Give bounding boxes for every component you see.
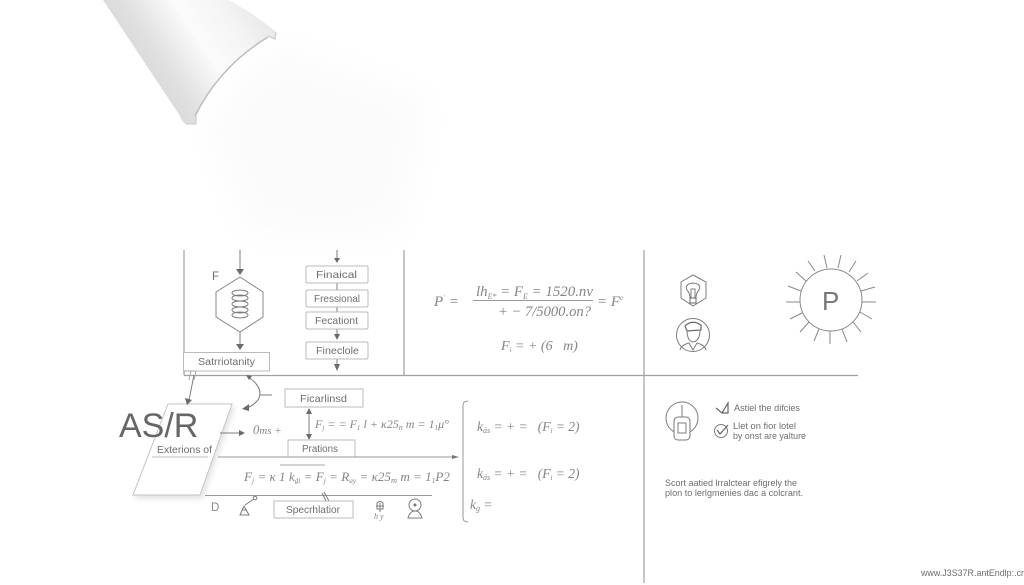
icon: circled check [714,424,728,438]
icon: small figure with label [374,502,384,521]
icon: hexagon with coil [216,277,263,332]
icon: check mark [716,403,728,413]
formula: lower: = κ 1 k [254,470,295,484]
equation 3: k [470,497,476,512]
formula: numerator: E [522,292,528,301]
formula: second line: F [501,339,510,354]
icon: light bulb hexagon [681,275,706,306]
icon: sun with letter P: P [822,286,839,316]
panel: stacked label boxes [306,250,368,371]
arrow: double headed [306,408,312,440]
formula: lower: 1 [432,477,435,485]
equation 3: g [476,504,480,513]
formula: numerator: = F [496,284,524,300]
box: Fecationt: Fecationt [315,315,358,327]
formula: left side: P [434,294,443,310]
note line 1: Scort aatied lrralctear efigrely the [665,478,797,488]
bracket [463,401,468,522]
rule below formula [205,494,432,496]
box: Ficarlinsd [285,389,363,407]
light beam [205,45,430,235]
formula: upper: 1 [435,424,438,432]
box: Satrriotanity: Satrriotanity [198,357,255,368]
arrow: from callout to card [184,371,196,405]
icon: person portrait [676,318,710,352]
formula: left side: ′ [443,294,445,302]
arrow: curved return [242,375,272,411]
formula: upper: 1 [357,424,360,432]
equation 2: i [550,474,552,482]
equation 2: ás [483,473,490,482]
equation 3: = [480,497,492,512]
formula: lower: F [244,470,252,484]
formula: upper: μ° [437,417,449,431]
formula: numerator: E* [487,292,496,301]
box: Finaical: Finaical [316,269,357,281]
checklist item 2 second line: by onst are yalture [733,431,806,441]
formula: second line: = + (6 m) [512,339,578,354]
panel: hexagon coil flow [184,250,270,371]
equation 1: k [477,419,483,434]
panel frame lines [184,250,858,583]
formula: lower: ay [349,477,357,485]
panel: AS/R parallelogram [119,371,282,495]
formula: left side: = [449,294,459,310]
formula: lower: m = 1 [397,470,432,484]
arrow: into hexagon [236,250,244,275]
formula: upper: F [315,417,322,431]
box: Fressional: Fressional [314,293,360,305]
label: D: D [211,502,219,514]
formula: lower: j [251,477,254,485]
formula: lower: P2 [434,470,450,484]
note line 2: plon to lerlgmenies dac a colcrant. [665,488,803,498]
formula: lower: = κ25 [356,470,391,484]
underline [152,456,208,458]
formula: numerator: lh [476,284,488,300]
arrow: into stack [334,250,340,263]
formula: upper: m = 1 [403,417,435,431]
checklist item 1: Astiel the difcies [734,403,801,413]
icon: compass [240,496,257,515]
icon: small figure with label: h y [374,512,384,521]
box: Ficarlinsd: Ficarlinsd [300,393,347,405]
arrow: from card to label [220,430,245,436]
equation 2: = + = (F [490,466,551,481]
formula label: Oms: 0ms + [253,423,282,437]
box: Specrhlatior [274,501,353,518]
box: Prations [288,440,355,457]
arrow: out of hexagon [236,332,244,350]
label: F: F [212,271,219,283]
formula: numerator: = 1520.nv [528,284,593,300]
equation 2: k [477,466,483,481]
pointer to Specrhlatior [322,492,329,501]
equation 2: = 2) [552,466,580,481]
box: Specrhlatior: Specrhlatior [286,504,340,516]
panel: checklist [665,402,806,498]
formula: right side: = F [597,294,620,310]
panel: main formula [433,284,623,354]
formula: lower: j [323,477,326,485]
formula: lower: m [391,476,397,485]
card: parallelogram [133,404,232,495]
label: Extensions of: Exterions of [157,445,212,456]
title: AS/R: AS/R [119,407,198,445]
box: Fineclole: Fineclole [316,345,359,357]
formula: upper: = = F [324,417,358,431]
formula: denominator: + − 7/5000.on? [498,304,591,320]
formula: upper: j [321,424,324,432]
formula: lower: = F [300,470,324,484]
formula: lower: = R [326,470,350,484]
rule above formula [280,464,325,466]
panel: bracket equations [463,401,580,522]
footer url: www.J3S37R.antEndlp:.cr [920,568,1024,578]
icon: ceiling lamp shade [103,0,276,124]
checklist item 2: Llet on fior lotel [733,421,796,431]
panel: equations and boxes [205,389,459,521]
formula: right side: e [620,294,623,302]
arrow: long horizontal [218,455,459,459]
icon: webcam figure [408,499,422,518]
formula: upper: l + κ25 [360,417,399,431]
formula: lower: ḏt [295,477,301,485]
connector lines between boxes [334,283,340,371]
equation 1: = + = (F [490,419,551,434]
box: Prations: Prations [302,444,338,455]
equation 1: = 2) [552,419,580,434]
formula: second line: i [510,346,512,354]
icon: device in circle [666,402,698,440]
formula: fraction bar [473,300,593,302]
icon: sun with letter P [786,255,876,344]
formula: upper: n [399,423,403,432]
equation 1: i [550,427,552,435]
equation 1: ás [483,426,490,435]
panel: icons and sun [676,255,876,352]
